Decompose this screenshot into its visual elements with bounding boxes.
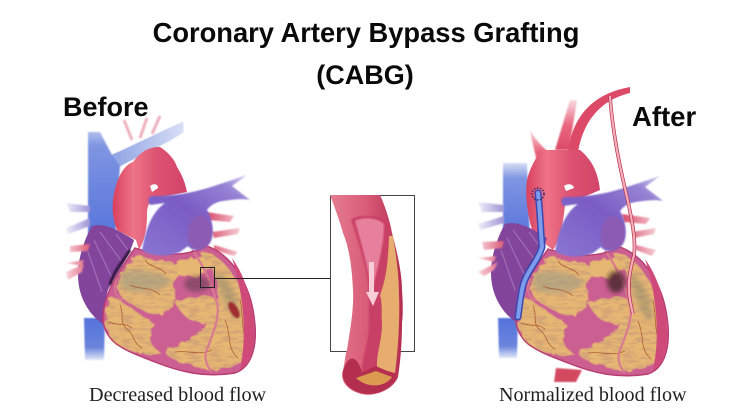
- panel: artery inset: [330, 195, 414, 395]
- pulmonary artery: [555, 176, 663, 257]
- inset marker box: [200, 268, 214, 288]
- aorta and branches: [526, 87, 630, 250]
- red bypass graft: [610, 96, 635, 314]
- panel: before heart: [63, 92, 255, 375]
- aorta: [113, 147, 187, 250]
- side vessels: [478, 214, 656, 276]
- heart muscle: [516, 247, 668, 376]
- side vessels: [66, 203, 240, 280]
- vena cava: [84, 116, 183, 360]
- leader line: [214, 278, 331, 280]
- dark shading: [607, 271, 625, 293]
- flow arrow: [366, 262, 379, 306]
- right atrium: [78, 225, 134, 326]
- heading: after: After: [632, 101, 696, 132]
- title: [153, 17, 579, 90]
- title: (CABG): [316, 60, 414, 90]
- blockage shading: [184, 276, 242, 320]
- artery cross-section: [343, 358, 396, 394]
- vena cava: [478, 163, 530, 358]
- plaque: [377, 236, 399, 373]
- heart muscle: [103, 246, 255, 375]
- caption: before: Decreased blood flow: [89, 384, 267, 406]
- pulmonary artery: [142, 175, 250, 256]
- heading: before: Before: [63, 92, 149, 122]
- lower aorta: [554, 368, 582, 382]
- artery outer wall: [330, 195, 403, 395]
- inset frame: [330, 196, 414, 352]
- artery lumen: [351, 216, 391, 372]
- panel: after heart: [478, 87, 696, 382]
- title: Coronary Artery Bypass Grafting: [153, 17, 579, 48]
- right atrium: [491, 223, 547, 324]
- caption: after: Normalized blood flow: [499, 384, 687, 406]
- blue bypass graft: [518, 188, 544, 317]
